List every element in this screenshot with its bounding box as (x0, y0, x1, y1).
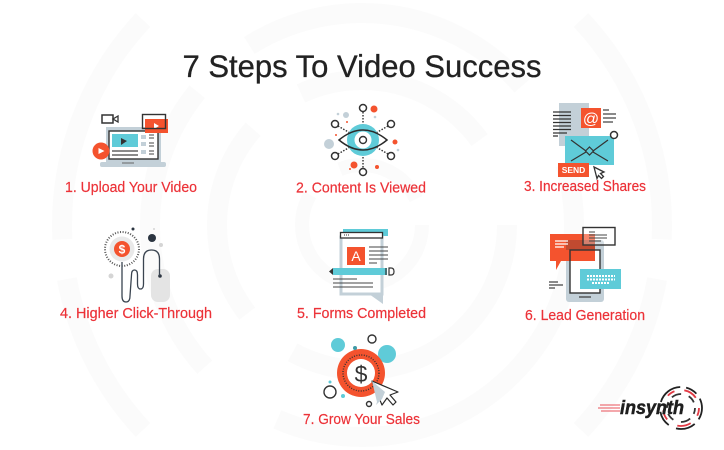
icon: email shares: @ (583, 111, 599, 128)
icon: eye network (324, 104, 399, 176)
title: 7 Steps To Video Success (182, 48, 542, 84)
icon: lead generation phone (549, 228, 621, 302)
icon: email shares (553, 103, 618, 178)
label 6: 6. Lead Generation (525, 307, 645, 324)
logo: insynth (598, 387, 702, 429)
icon: mouse click-through: $ (119, 242, 126, 256)
icon: grow sales dollar cursor: $ (355, 361, 368, 387)
label 2: 2. Content Is Viewed (296, 180, 426, 196)
label 3: 3. Increased Shares (524, 178, 646, 195)
icon: grow sales dollar cursor (324, 335, 398, 406)
icon: mouse click-through (105, 228, 170, 302)
label 7: 7. Grow Your Sales (303, 411, 420, 428)
icon: form document (329, 229, 394, 304)
label 1: 1. Upload Your Video (65, 179, 197, 196)
icon: email shares: SEND (562, 165, 585, 175)
icon: upload video laptop (92, 114, 168, 167)
label 4: 4. Higher Click-Through (60, 305, 212, 322)
logo: insynth: insynth (620, 398, 684, 419)
label 5: 5. Forms Completed (297, 305, 426, 322)
icon: form document: A (351, 248, 361, 264)
